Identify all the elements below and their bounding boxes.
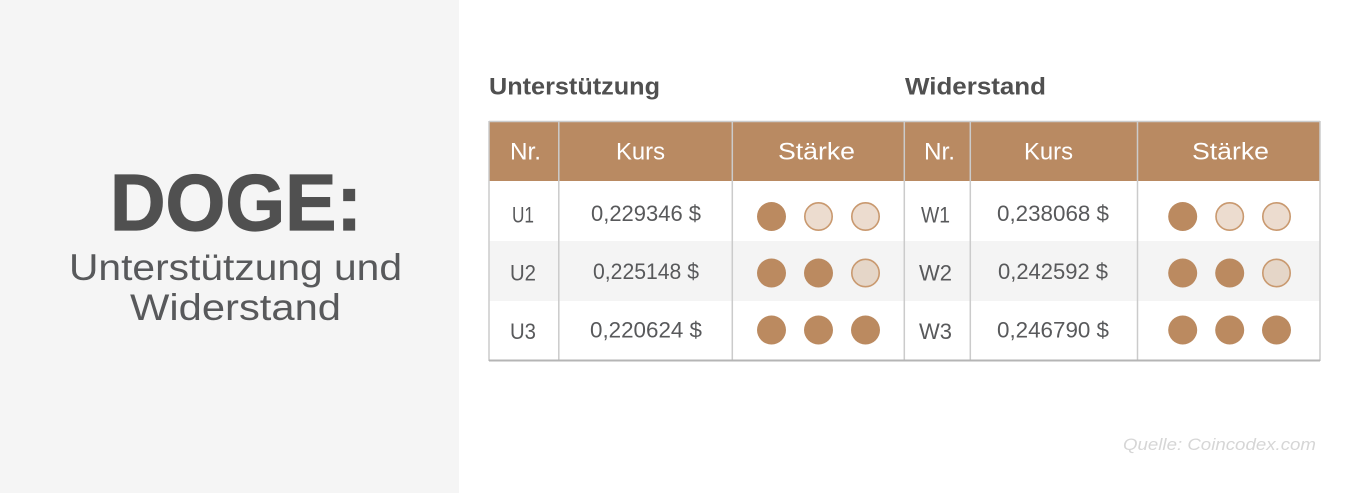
table header labels: Nr. xyxy=(510,138,541,166)
row U2: 0,225148 $ xyxy=(593,259,699,284)
table header labels: Nr. xyxy=(924,138,955,166)
heading: Unterstützung: Unterstützung xyxy=(489,74,660,100)
row W1: 0,238068 $ xyxy=(997,201,1109,226)
table header labels: Stärke xyxy=(1192,138,1269,166)
title xyxy=(69,158,402,328)
row U2 xyxy=(510,258,879,288)
row W3: 0,246790 $ xyxy=(997,318,1109,342)
table header labels: Kurs xyxy=(616,138,665,166)
row W1: W1 xyxy=(921,202,950,228)
row U3: U3 xyxy=(510,319,536,344)
table xyxy=(489,121,1320,361)
table header labels: Kurs xyxy=(1024,138,1073,166)
panel: title background xyxy=(0,0,459,493)
row W2: 0,242592 $ xyxy=(998,259,1108,284)
table header labels: Stärke xyxy=(778,138,855,166)
heading: Widerstand: Widerstand xyxy=(905,74,1046,100)
heading: DOGE: DOGE: xyxy=(110,158,362,247)
table header labels xyxy=(510,138,1269,166)
subtitle line 2: Widerstand xyxy=(130,287,341,328)
row W3: W3 xyxy=(919,319,952,344)
row U3 xyxy=(510,316,880,344)
row W3 xyxy=(919,316,1291,344)
source note: Quelle: Coincodex.com xyxy=(1123,435,1316,454)
subtitle line 1: Unterstützung und xyxy=(69,247,402,288)
row U2: U2 xyxy=(510,260,536,286)
row U1 xyxy=(512,201,879,231)
row U3: 0,220624 $ xyxy=(590,318,702,342)
table row 2 band xyxy=(489,241,1320,301)
row U1: 0,229346 $ xyxy=(591,201,701,226)
row W2: W2 xyxy=(919,260,952,286)
row W1 xyxy=(921,201,1290,231)
table header band xyxy=(489,121,1320,181)
row W2 xyxy=(919,258,1290,288)
row U1: U1 xyxy=(512,202,534,228)
